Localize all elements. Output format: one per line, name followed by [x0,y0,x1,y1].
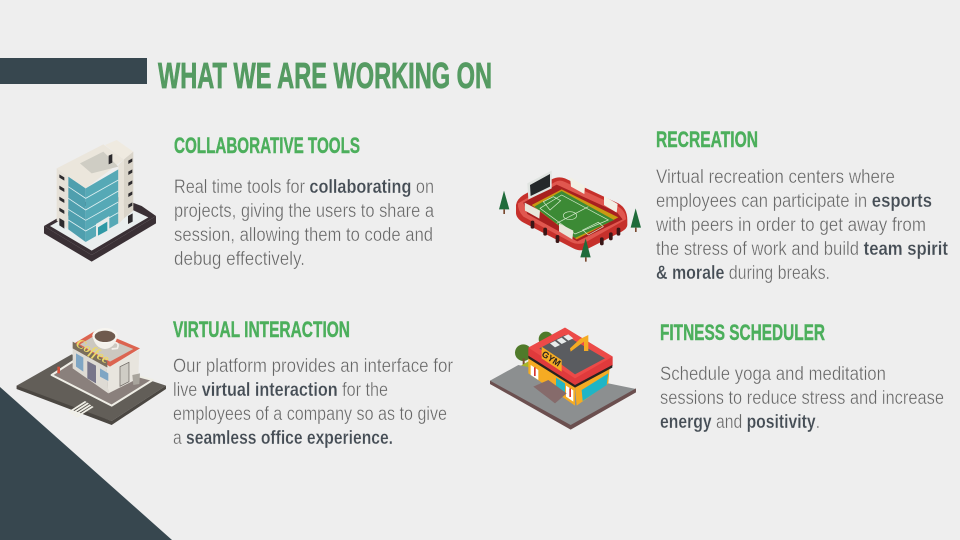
text block: employees of a company so as to give [173,404,447,425]
text block: projects, giving the users to share a [174,201,434,222]
icon: gym building: GYM [540,349,563,368]
panel: fitness scheduler [490,320,944,433]
icon: office building [44,140,156,262]
text block: the stress of work and build team spirit [656,239,949,260]
text block: energy and positivity. [660,412,820,433]
text block [174,177,434,270]
text block [655,167,949,284]
icon: gym building [490,328,636,430]
text block: session, allowing them to code and [174,225,433,246]
text block: Virtual recreation centers where [656,167,895,188]
heading: COLLABORATIVE TOOLS [174,133,360,158]
text block: Our platform provides an interface for [173,356,454,377]
text block [173,356,454,449]
text block: debug effectively. [174,249,305,270]
text block: with peers in order to get away from [655,215,926,236]
text block: & morale during breaks. [656,263,830,284]
title: WHAT WE ARE WORKING ON [158,55,492,96]
heading: FITNESS SCHEDULER [660,320,825,345]
text block: live virtual interaction for the [173,380,388,401]
text block: a seamless office experience. [173,428,393,449]
text block: Real time tools for collaborating on [174,177,434,198]
header bar [0,58,147,84]
panel: recreation [499,127,949,284]
text block: Schedule yoga and meditation [660,364,886,385]
text block: employees can participate in esports [656,191,932,212]
corner triangle [0,387,172,540]
panel: collaborative tools [44,133,434,270]
icon: coffee shop: Coffee [73,335,112,366]
icon: stadium [499,171,641,262]
panel: virtual interaction [17,317,454,449]
heading: RECREATION [656,127,758,152]
heading: VIRTUAL INTERACTION [173,317,350,342]
icon: coffee shop [17,328,166,425]
text block [660,364,944,433]
